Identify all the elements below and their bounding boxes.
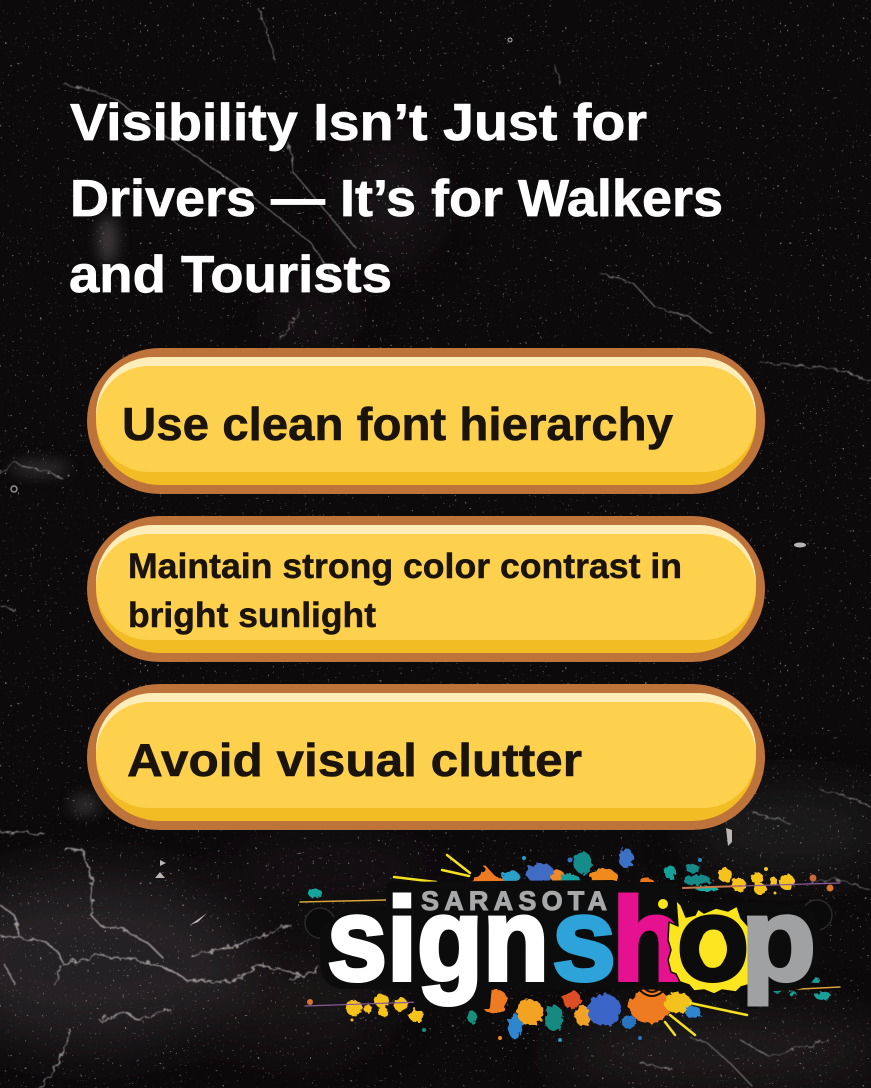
- label: Use clean font hierarchy: [122, 398, 673, 450]
- panel: button maintain strong color contrast: [87, 516, 765, 662]
- letter h: h: [612, 874, 684, 1006]
- black backing: [322, 882, 820, 1009]
- label: bright sunlight: [128, 596, 376, 635]
- title: and Tourists: [69, 246, 392, 304]
- label: Maintain strong color contrast in: [128, 547, 682, 586]
- label: [128, 547, 682, 635]
- scratches: [11, 38, 806, 925]
- letter s: s: [552, 874, 616, 1006]
- SARASOTA wordmark: SARASOTA: [421, 886, 607, 916]
- letter o: o: [677, 874, 749, 1006]
- black splat outline: [654, 895, 672, 913]
- side speaker rings: [305, 900, 832, 938]
- paint splatter: [308, 848, 831, 1039]
- splat drop: [658, 899, 668, 909]
- letter p: p: [741, 874, 816, 1006]
- label: Avoid visual clutter: [127, 734, 582, 786]
- panel: button avoid visual clutter: [87, 684, 765, 830]
- ink rings: [636, 986, 668, 996]
- yellow splat: [668, 900, 760, 994]
- panel: button use clean font hierarchy: [87, 348, 765, 494]
- title: Visibility Isn’t Just for: [70, 94, 647, 152]
- logo: Sarasota Sign Shop: [300, 848, 840, 1042]
- sign wordmark: sign: [327, 874, 549, 1006]
- o counter: [699, 932, 727, 966]
- title: Drivers — It’s for Walkers: [70, 170, 723, 228]
- title: [69, 94, 723, 304]
